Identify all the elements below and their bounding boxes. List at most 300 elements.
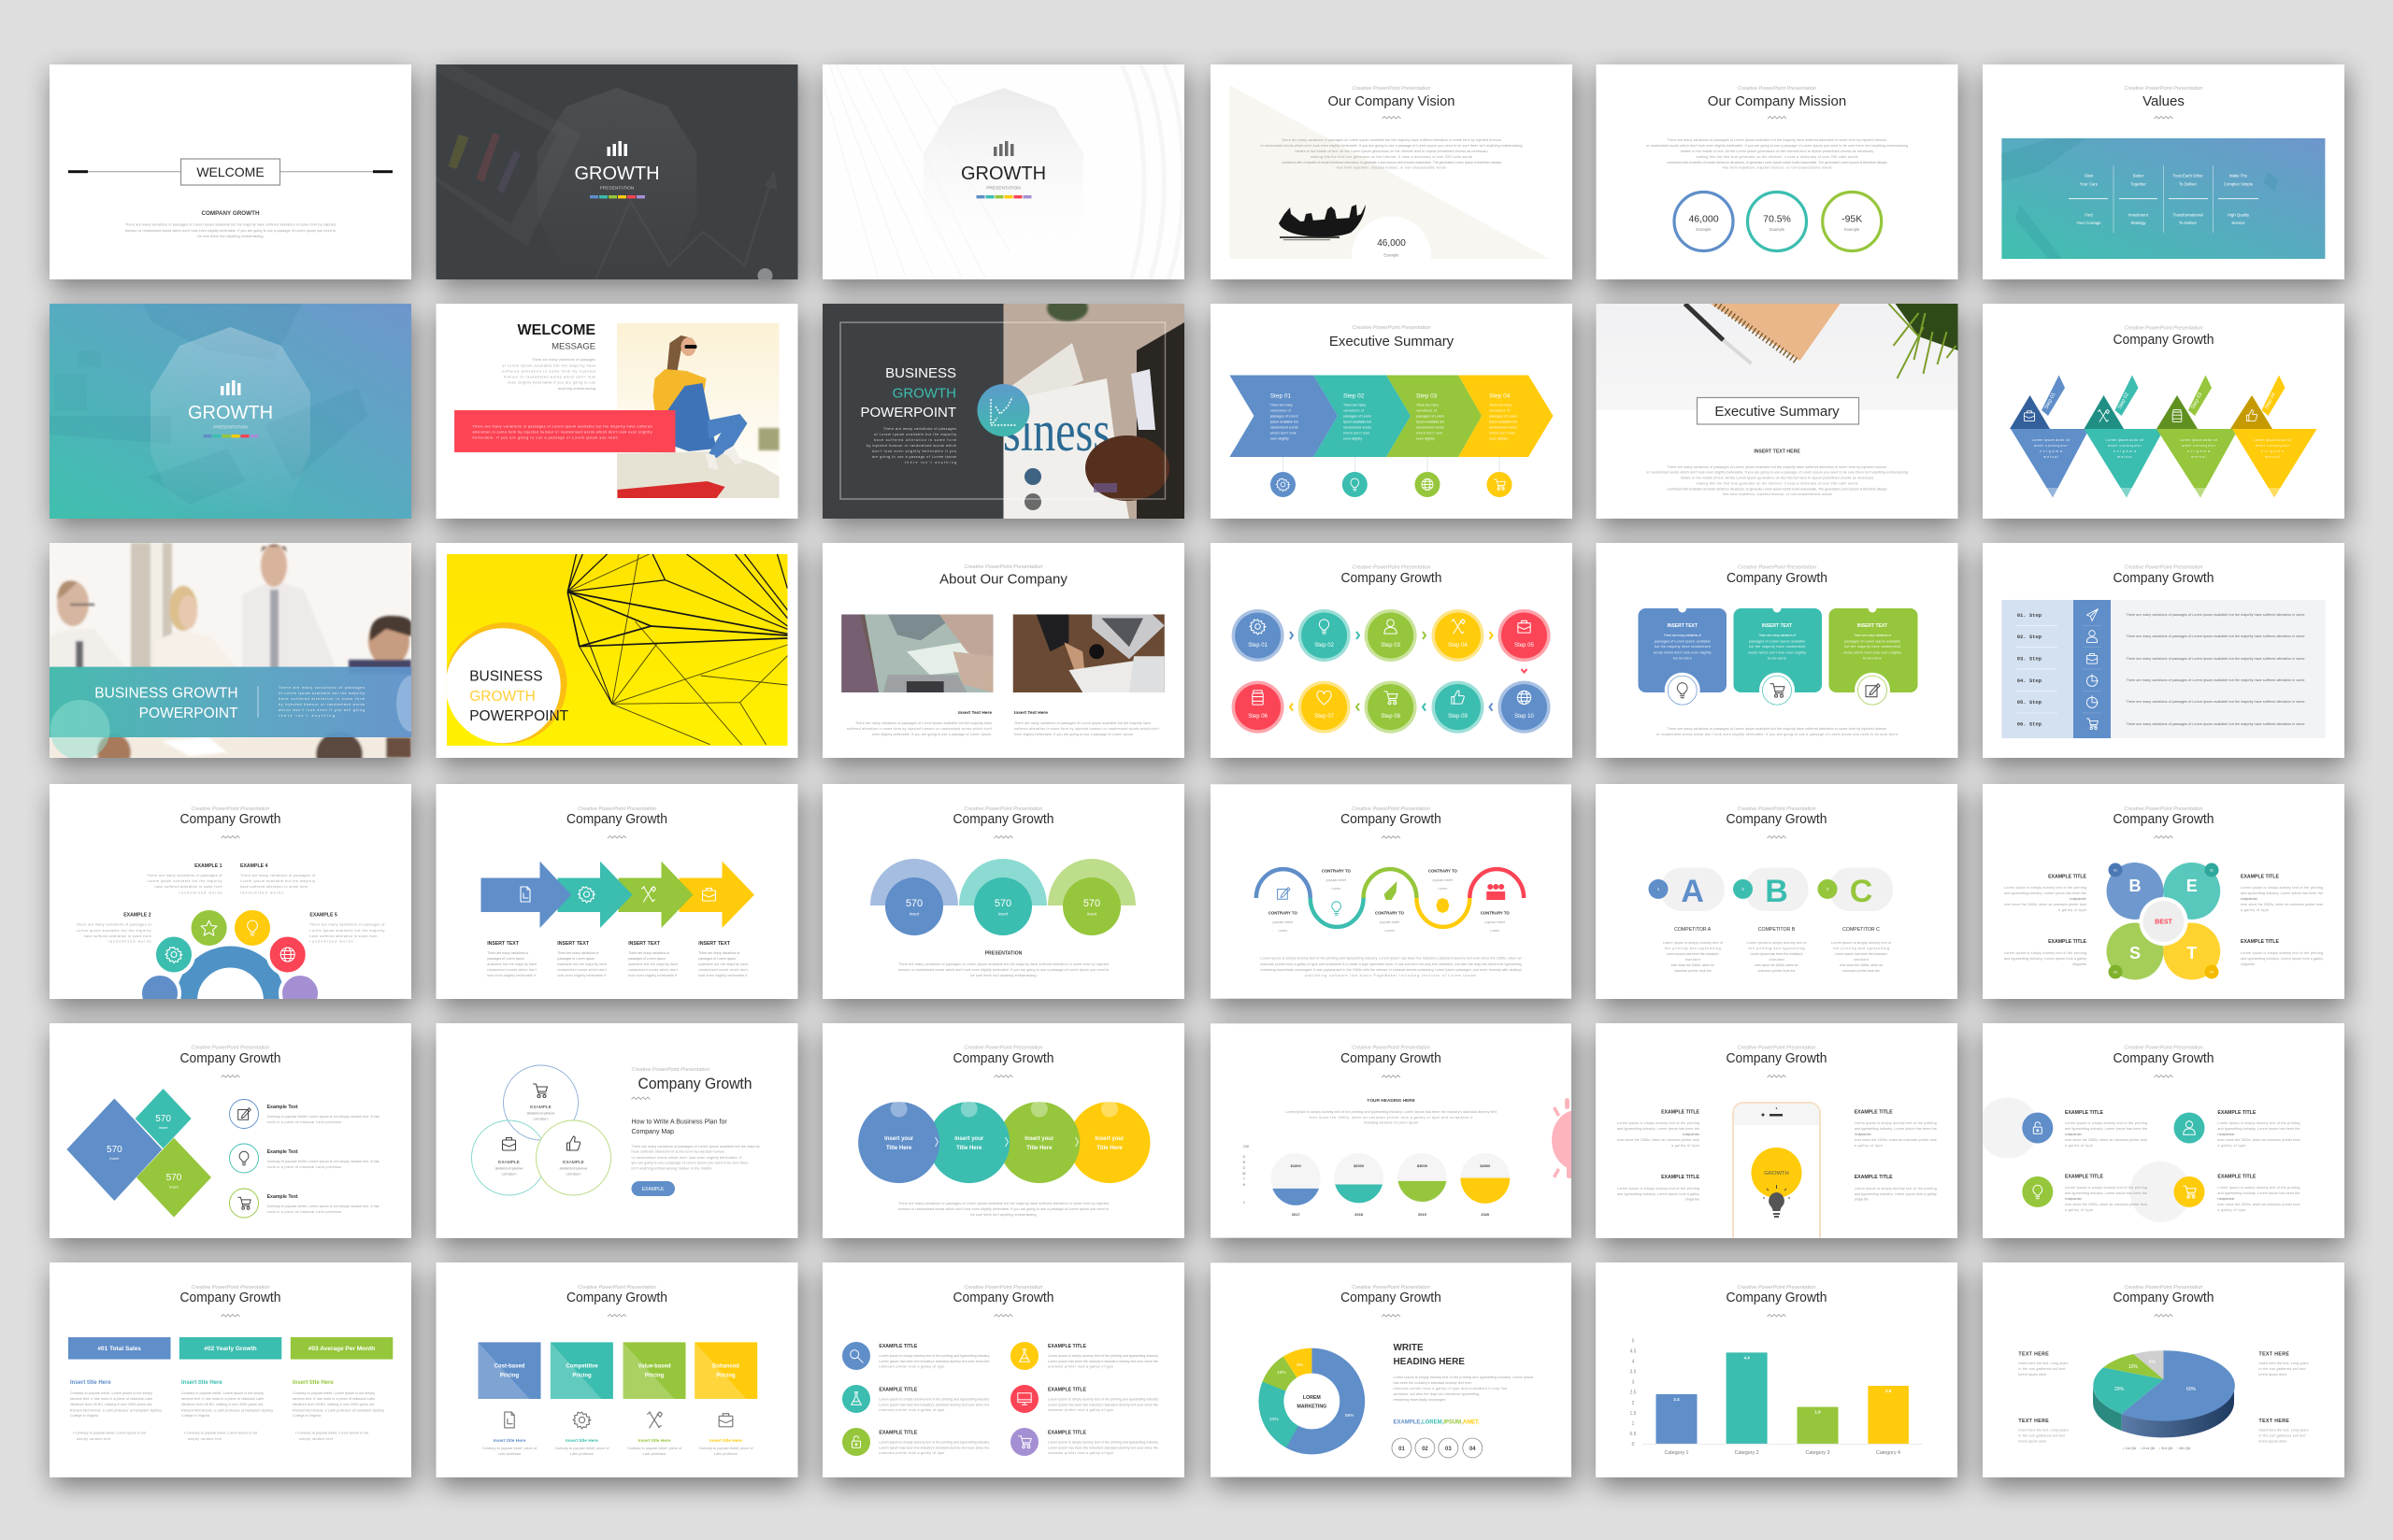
competitor B: COMPETITOR B <box>1758 927 1796 933</box>
paragraphs: a galley of type <box>1671 1144 1699 1148</box>
paragraphs: Lorem Ipsum is simply dummy text of the printing and typesetting industry <box>879 1441 990 1445</box>
pricing captions: Insert title Here <box>638 1438 671 1444</box>
chevron process: Step 02 <box>1343 392 1365 400</box>
card green: There are many variations of <box>1854 634 1891 637</box>
categories: Category 4 <box>1876 1450 1900 1456</box>
paragraphs: Lorem Ipsum is simply dummy text of the printing <box>1617 1187 1699 1191</box>
paragraphs: and typesetting industry. Lorem Ipsum has been the <box>1617 1127 1699 1131</box>
item 1: Contrary to popular belief, Lorem Ipsum is not simply random text. It has <box>267 1115 380 1119</box>
wave label notes: popular belief <box>1380 920 1399 924</box>
stat circle 2 <box>1748 192 1806 250</box>
vertical axis: H <box>1243 1183 1246 1187</box>
bottom row circles: Step 08 <box>1381 714 1401 720</box>
paragraphs <box>2018 1362 2309 1443</box>
wave label notes: popular belief <box>1326 878 1346 882</box>
chevron process: randomised words <box>1343 426 1371 430</box>
pale discs <box>1978 1097 2191 1222</box>
icon: bars <box>994 141 1013 156</box>
paragraph: or randomised words which don't look even slightly believable. If you are going to use a passage of Lorem Ipsum you need to be sure there isn't anything embarrassing <box>1646 471 1908 475</box>
chevron process: passages of Lorem <box>1343 415 1371 419</box>
column titles: Insert title Here <box>70 1380 111 1386</box>
pricing captions: Insert title Here <box>494 1438 526 1444</box>
heading <box>179 806 280 838</box>
heading <box>2125 86 2202 119</box>
paragraphs: Lorem Ipsum has been the industry's standard dummy text ever since the <box>1048 1404 1158 1407</box>
gauge 3: 2019 <box>1418 1212 1427 1217</box>
paragraph blocks: randomised words <box>108 940 151 944</box>
heading: Creative PowerPoint Presentation <box>1352 806 1430 812</box>
heading <box>94 686 238 721</box>
pricing captions: Insert title Here <box>709 1438 742 1444</box>
chevron process: Ipsum available but <box>1489 421 1517 424</box>
paragraphs: in the sun gathered sail text <box>2258 1367 2305 1371</box>
pricing notes: Latin professor <box>643 1452 666 1456</box>
paragraphs: in the sun gathered sail text <box>2018 1433 2065 1437</box>
paragraphs: There are many variations of <box>487 951 528 955</box>
panel: slide 2 growth dark cover <box>436 64 798 279</box>
icon discs <box>2022 1112 2204 1207</box>
triangle captions: exigama <box>2040 449 2062 453</box>
heading <box>179 1285 280 1317</box>
item 2 <box>230 1144 380 1173</box>
panel: slide 16 ten steps <box>1211 543 1572 758</box>
paragraphs: a galley of type <box>2217 1144 2245 1148</box>
panel: slide 13 business team photo <box>50 543 411 758</box>
chevron process: randomised words <box>1416 426 1444 430</box>
paragraph: Lorem Ipsum is simply dummy text of the printing and typesetting industry. Lorem Ipsum has been the industry's standard dummy text ever since the 1500s, when an <box>1260 957 1522 961</box>
paragraph: be sure there isn't anything embarrassing <box>198 235 264 238</box>
values panel: Strategy <box>2130 221 2146 225</box>
dome blue: 570 <box>906 898 923 909</box>
circles: Title Here <box>1096 1146 1123 1151</box>
chevron process: Step 01 <box>1270 392 1291 400</box>
pricing tiles: Pricing <box>716 1374 736 1379</box>
BEST circles: 03 <box>2114 970 2117 974</box>
heading <box>939 564 1068 587</box>
dome teal <box>959 859 1047 935</box>
paragraphs: Lorem Ipsum is simply dummy text of the printing and typesetting industry <box>1048 1441 1158 1445</box>
panel: slide 23 competitors <box>1596 784 1957 999</box>
heading: Company Growth <box>2113 1050 2214 1066</box>
values panel: Trust Each Other <box>2172 174 2203 178</box>
example titles: EXAMPLE TITLE <box>1048 1430 1086 1435</box>
table: 06. Step <box>2017 721 2042 728</box>
captions: INSERT TEXT <box>487 941 520 947</box>
heading <box>860 365 956 421</box>
3d pie: 6% <box>2149 1360 2157 1365</box>
panel: slide 1 welcome <box>50 64 411 279</box>
paragraphs <box>1617 1121 1937 1202</box>
example titles: EXAMPLE TITLE <box>1855 1175 1893 1180</box>
paragraphs: a galley of type <box>2065 1144 2093 1148</box>
top row circles <box>1232 609 1550 662</box>
paragraphs: There are many variations of <box>698 951 739 955</box>
triangle captions: metsal <box>2043 455 2058 459</box>
paragraph blocks: There are many variations of passages of <box>240 874 315 877</box>
column paragraphs: Richard McClintock, a Latin professor at Hampden-Sydney <box>70 1409 162 1413</box>
badge: chart icon <box>978 384 1030 436</box>
gauge 1: 2017 <box>1292 1212 1300 1217</box>
card blue: INSERT TEXT <box>1667 623 1698 629</box>
paragraph: There are many variations of passages of Lorem Ipsum available but the majority have suffered alteration in some form by injected <box>898 962 1109 966</box>
gauge 2: $2000 <box>1354 1163 1365 1168</box>
competitor A: 1 <box>1657 887 1660 891</box>
y axis labels: 0 <box>1632 1442 1635 1447</box>
item 1 <box>230 1099 380 1129</box>
triangle captions: exigama <box>2187 449 2210 453</box>
triangle green: Step 03 <box>2190 392 2203 410</box>
wave label notes: Lorem <box>1490 929 1499 933</box>
heading: Creative PowerPoint Presentation <box>2125 325 2202 331</box>
paragraphs: in the sun gathered sail text <box>2018 1367 2065 1371</box>
top row circles: Step 02 <box>1314 643 1335 649</box>
subheading: PRESENTATION <box>985 951 1023 957</box>
icon discs <box>842 1342 1039 1456</box>
card blue: words which don't look even slightly <box>1654 651 1712 655</box>
column headers: #03 Average Per Month <box>308 1346 375 1352</box>
heading <box>2113 806 2214 838</box>
vertical axis: G <box>1243 1155 1246 1159</box>
card green: believable <box>1863 657 1882 661</box>
paragraph: be sure there isn't anything embarrassing <box>970 1213 1036 1217</box>
paragraphs: and typesetting industry. Lorem Ipsum took a galley <box>2241 957 2323 961</box>
panel: slide 11 executive summary desk photo <box>1597 304 1957 519</box>
heading right: WRITE <box>1393 1343 1424 1353</box>
donut chart <box>1255 1346 1368 1457</box>
paragraph: don't look even slightly believable if you <box>872 449 956 453</box>
chevron process: Ipsum available but <box>1343 421 1371 424</box>
stat circle 3 <box>1823 192 1882 250</box>
paragraphs: ever since the 1500s, when an unknown printer took <box>2217 1203 2300 1206</box>
paragraphs: available but the majority have <box>698 962 748 966</box>
subtitle: PRESENTATION <box>600 186 635 192</box>
chevron process: randomised words <box>1270 426 1298 430</box>
panel: slide 19 semicircle cycle <box>50 784 411 999</box>
chevron process: which don't look <box>1489 432 1515 435</box>
donut centre <box>1297 1395 1326 1409</box>
chevron process: randomised words <box>1489 426 1517 430</box>
circles: Insert your <box>1095 1136 1125 1142</box>
stat circle 2: Example <box>1770 227 1785 232</box>
example titles <box>1661 1110 1893 1180</box>
paragraphs: lorem ipsum dolor <box>2258 1373 2287 1376</box>
heading <box>1340 1285 1441 1317</box>
heading: Creative PowerPoint Presentation <box>1738 1045 1815 1050</box>
wave labels: CONTRARY TO <box>1481 910 1510 915</box>
heading right <box>1393 1343 1465 1367</box>
competitor notes: the printing and typesetting <box>1833 947 1889 950</box>
card green: but the majority have randomised <box>1844 645 1900 649</box>
paragraphs: available but the majority have <box>628 962 678 966</box>
paragraph: there isn't anything <box>905 461 956 464</box>
column paragraphs: random text. It has roots in a piece of classical Latin <box>70 1397 152 1401</box>
icon: pink bulb <box>1552 1098 1600 1178</box>
values panel: Transformational <box>2172 213 2203 217</box>
paragraphs: Insert here the text. Long years <box>2258 1362 2309 1365</box>
top row circles: Step 04 <box>1448 643 1469 649</box>
subheading: Company Map <box>632 1129 674 1135</box>
heading: Creative PowerPoint Presentation <box>2125 86 2202 92</box>
categories: Category 2 <box>1735 1450 1759 1456</box>
card green: words which don't look even slightly <box>1843 651 1901 655</box>
venn content <box>495 1084 588 1176</box>
photo: woman on car <box>617 323 780 498</box>
paragraphs: look even slightly believable if <box>628 974 677 977</box>
competitor notes: ever since the 1500s, when an <box>1755 963 1798 967</box>
example titles: EXAMPLE TITLE <box>1855 1110 1893 1116</box>
example titles: EXAMPLE TITLE <box>1661 1110 1700 1116</box>
icon: bars <box>608 141 627 156</box>
paragraph: of Lorem Ipsum available but the majority have <box>502 364 595 368</box>
pricing notes: Latin professor <box>497 1452 522 1456</box>
heading: Company Growth <box>2113 570 2214 586</box>
triangle captions: metsal <box>2191 455 2206 459</box>
column headers <box>68 1337 393 1360</box>
paragraphs: Lorem Ipsum has been the industry's standard dummy text ever since the <box>879 1404 989 1407</box>
gauge 4: $4000 <box>1480 1163 1491 1168</box>
paragraphs: Lorem Ipsum is simply dummy text of the printing <box>2217 1121 2300 1125</box>
heading <box>953 806 1054 838</box>
paragraphs: Lorem Ipsum has been the industry's standard dummy text ever since the <box>879 1360 989 1363</box>
values panel: To Deliver <box>2179 181 2198 187</box>
heading <box>1726 1285 1827 1317</box>
values panel: Complex Simple <box>2224 181 2254 187</box>
column bullets: • Contrary to popular belief, Lorem Ipsum is not <box>295 1432 368 1435</box>
pricing notes: Contrary to popular belief, piece of <box>627 1447 681 1450</box>
panel: slide 8 welcome message <box>436 304 798 519</box>
triangle yellow: Step 04 <box>2264 392 2277 410</box>
node icons <box>165 920 294 962</box>
y axis labels: 1 <box>1632 1421 1635 1427</box>
paragraph blocks: have suffered alteration in some form <box>84 934 151 938</box>
paragraphs: of type the <box>1855 1198 1869 1202</box>
panel: slide 32 pricing <box>436 1262 798 1477</box>
paragraphs: and typesetting industry. Lorem Ipsum has been the <box>2217 1191 2300 1195</box>
triangle captions: amet consequtur <box>2182 444 2216 448</box>
competitor notes: the printing and typesetting <box>1665 947 1721 950</box>
chevron process: even slightly <box>1416 437 1435 441</box>
heading: Creative PowerPoint Presentation <box>2125 1285 2202 1290</box>
heading <box>1329 325 1454 349</box>
paragraph blocks: There are many variations of passages of <box>148 874 222 877</box>
heading: Creative PowerPoint Presentation <box>965 564 1042 570</box>
paragraphs: randomised words which don't <box>698 968 748 972</box>
item 2: roots in a piece of classical Latin professor <box>267 1165 342 1169</box>
chevron process: which don't look <box>1270 432 1297 435</box>
competitor notes: Lorem Ipsum is simply dummy text of <box>1831 941 1891 945</box>
paragraphs: ever since the 1500s, when an unknown printer took <box>2065 1203 2147 1206</box>
pricing tiles: Pricing <box>500 1374 520 1379</box>
paragraphs: randomised words which don't <box>557 968 607 972</box>
bar values <box>1673 1355 1892 1415</box>
bar values: 2.8 <box>1885 1389 1892 1393</box>
dome green <box>1048 859 1136 935</box>
paragraph <box>632 1145 760 1170</box>
panel: slide 29 phone <box>1596 1023 1957 1238</box>
wave label notes <box>1273 878 1505 933</box>
text labels: TEXT HERE <box>2018 1419 2049 1424</box>
donut labels: 58% <box>1345 1413 1354 1419</box>
chevron process: even slightly <box>1270 437 1289 441</box>
wave label notes: Lorem <box>1384 929 1395 933</box>
paragraphs: of type the <box>2241 962 2255 966</box>
captions: Insert Text Here <box>958 710 992 716</box>
paragraph: remaining essentially unchanged <box>1393 1398 1445 1402</box>
icon circles <box>1270 472 1512 497</box>
subtitle: PRESENTATION <box>986 186 1021 192</box>
subheading <box>632 1119 727 1135</box>
card green: INSERT TEXT <box>1857 623 1887 629</box>
heading <box>179 1045 280 1077</box>
paragraph: of Lorem Ipsum available but the majority <box>279 692 365 695</box>
paragraphs: ever since the 1500s, when an unknown printer took <box>2065 1138 2147 1142</box>
stat circle 3: Example <box>1844 227 1860 232</box>
venn content: standard dummy text ever <box>527 1112 555 1116</box>
paragraph: of Lorem Ipsum available but the majority <box>874 433 956 436</box>
y axis labels: 2.5 <box>1630 1390 1637 1396</box>
paragraph: which don't look even if you are going <box>279 708 365 712</box>
triangle captions: Lorem ipsum dolor sit <box>2254 438 2291 442</box>
wave icons <box>1278 881 1505 915</box>
item 2: Example Text <box>267 1149 298 1155</box>
cycle nodes <box>140 908 320 1013</box>
paragraph: ever since the 1500s, when an unknown printer took a galley of type and scrambled it <box>1310 1116 1472 1119</box>
paragraph: there isn't anything <box>279 714 335 718</box>
paragraphs: Lorem Ipsum is simply dummy text of the printing and typesetting industry <box>1048 1354 1158 1358</box>
paragraphs <box>487 951 748 977</box>
chevron process: even slightly <box>1489 437 1508 441</box>
circles: Insert your <box>1025 1136 1054 1142</box>
heading: Company Growth <box>179 1290 280 1305</box>
heading: Creative PowerPoint Presentation <box>1353 86 1430 92</box>
heading: Company Growth <box>1340 811 1441 827</box>
paragraphs: passages of Lorem Ipsum <box>487 957 524 961</box>
triangle captions <box>2032 438 2291 459</box>
venn circles <box>471 1065 611 1195</box>
paragraph: have suffered alteration in some form by injected humour <box>632 1150 725 1154</box>
paragraph: There are many variations of passages <box>883 427 956 431</box>
bar values: 2.4 <box>1673 1397 1680 1402</box>
red callout: alteration in some form by injected humour or randomised words which don't look even slightly <box>473 430 652 434</box>
venn content: EXAMPLE <box>563 1160 584 1165</box>
heading <box>1340 806 1441 838</box>
competitor notes: Lorem Ipsum is simply dummy text of <box>1746 941 1806 945</box>
paragraph: making this the first true generator on the Internet. It uses a dictionary of over 200 Latin words <box>1311 155 1472 159</box>
table: 04. Step <box>2017 677 2042 684</box>
heading: About Our Company <box>939 572 1068 587</box>
gauge 1: $1000 <box>1291 1163 1301 1168</box>
pricing tiles: Pricing <box>572 1374 592 1379</box>
chevron process: There are many <box>1489 404 1512 407</box>
paragraphs: available but the majority have <box>487 962 537 966</box>
paragraph <box>898 1202 1109 1217</box>
donut centre: MARKETING <box>1297 1404 1326 1409</box>
pricing notes: Latin professor <box>714 1452 738 1456</box>
competitor notes: unknown printer took the <box>1757 969 1795 973</box>
triangle teal: Step 02 <box>2117 392 2130 410</box>
paragraph blocks: Lorem Ipsum available but the majority <box>240 879 315 883</box>
stat circle 1 <box>1674 192 1733 250</box>
paragraphs: Lorem Ipsum is simply dummy text of the printing <box>2241 951 2323 955</box>
categories: Category 3 <box>1806 1450 1830 1456</box>
paragraphs: of type the <box>2072 962 2086 966</box>
competitor notes: Lorem Ipsum has been the industry's <box>1835 952 1887 956</box>
heading: Creative PowerPoint Presentation <box>1738 564 1816 570</box>
paragraphs: Lorem Ipsum is simply dummy text of the printing <box>2004 951 2086 955</box>
heading: Creative PowerPoint Presentation <box>965 1285 1042 1290</box>
paragraphs: and typesetting industry. Lorem Ipsum has been the <box>2217 1127 2300 1131</box>
pricing tiles: Cost-based <box>494 1364 525 1370</box>
captions: INSERT TEXT <box>557 941 590 947</box>
panel: slide 31 three columns <box>50 1262 411 1477</box>
competitor notes: unknown printer took the <box>1842 969 1880 973</box>
wave label notes: popular belief <box>1484 920 1505 924</box>
heading: Company Growth <box>1727 570 1827 586</box>
heading: BUSINESS <box>885 365 956 381</box>
paragraph <box>1285 1110 1497 1125</box>
paragraphs: industry's standard <box>2217 1197 2234 1201</box>
circles <box>858 1101 1150 1183</box>
paragraph: you are going to use a passage of Lorem Ipsum you need to be sure there <box>632 1162 748 1165</box>
top row circles: Step 01 <box>1248 643 1268 649</box>
card teal: but the majority have randomised <box>1749 645 1805 649</box>
bars <box>1642 1352 1923 1444</box>
heading <box>1340 1046 1441 1077</box>
example titles <box>879 1344 1086 1435</box>
column paragraphs: Contrary to popular belief, Lorem Ipsum is not simply <box>181 1391 264 1395</box>
paragraphs: Lorem Ipsum has been the industry's standard dummy text ever since the <box>879 1447 989 1450</box>
heading <box>2113 1285 2214 1317</box>
paragraphs: randomised words which don't <box>628 968 678 972</box>
column bullets <box>73 1432 368 1441</box>
values panel: Investment <box>2128 213 2149 217</box>
pricing notes: Contrary to popular belief, piece of <box>482 1447 537 1450</box>
subtitle: PRESENTATION <box>213 425 248 431</box>
paragraph: are going to use a passage of Lorem Ipsum <box>872 455 956 459</box>
paragraphs: and typesetting industry. Lorem Ipsum took a galley <box>1617 1192 1699 1196</box>
panel: slide 34 donut chart <box>1211 1262 1571 1477</box>
pricing icons <box>505 1412 733 1429</box>
venn content: standard dummy text ever <box>495 1166 523 1170</box>
vertical axis: O <box>1243 1166 1246 1170</box>
diamonds: 570 <box>166 1173 182 1183</box>
venn content: Lorem Ipsum <box>501 1172 516 1176</box>
table: There are many variations of passages of Lorem Ipsum available but the majority have suffered alteration in some <box>2126 613 2305 617</box>
paragraph blocks: Lorem Ipsum available but the majority <box>77 929 151 933</box>
example titles: EXAMPLE TITLE <box>2065 1110 2103 1116</box>
heading: Company Growth <box>1726 1050 1827 1066</box>
heading: BUSINESS <box>469 668 543 684</box>
text labels: TEXT HERE <box>2258 1351 2289 1357</box>
heading right: HEADING HERE <box>1393 1357 1465 1367</box>
paragraph: making this the first true generator on the Internet. It uses a dictionary of over 200 Latin words <box>1696 482 1858 486</box>
heading: Company Growth <box>179 811 280 827</box>
paragraph: or randomised words which don't look even slightly believable. If you are going to use a passage of Lorem Ipsum you need to be sure there isn't anything embarrassing <box>1646 144 1908 148</box>
competitor B <box>1733 867 1808 933</box>
top row circles: Step 05 <box>1514 643 1535 649</box>
paragraph: including versions of Lorem Ipsum <box>1364 1121 1418 1125</box>
heading <box>566 806 667 838</box>
card blue: There are many variations of <box>1664 634 1701 637</box>
BEST circles: S <box>2129 944 2141 962</box>
paragraphs: industry's standard <box>1683 1133 1699 1136</box>
paragraphs: ever since the 1500s, when an unknown printer took <box>2217 1138 2300 1142</box>
paragraph blocks: have suffered alteration in some form <box>155 885 222 889</box>
column paragraphs: Contrary to popular belief, Lorem Ipsum is not simply <box>70 1391 152 1395</box>
heading: Company Growth <box>566 1290 667 1305</box>
colour bar <box>204 435 258 437</box>
paragraphs: and typesetting industry. Lorem Ipsum has been the <box>2241 891 2323 895</box>
